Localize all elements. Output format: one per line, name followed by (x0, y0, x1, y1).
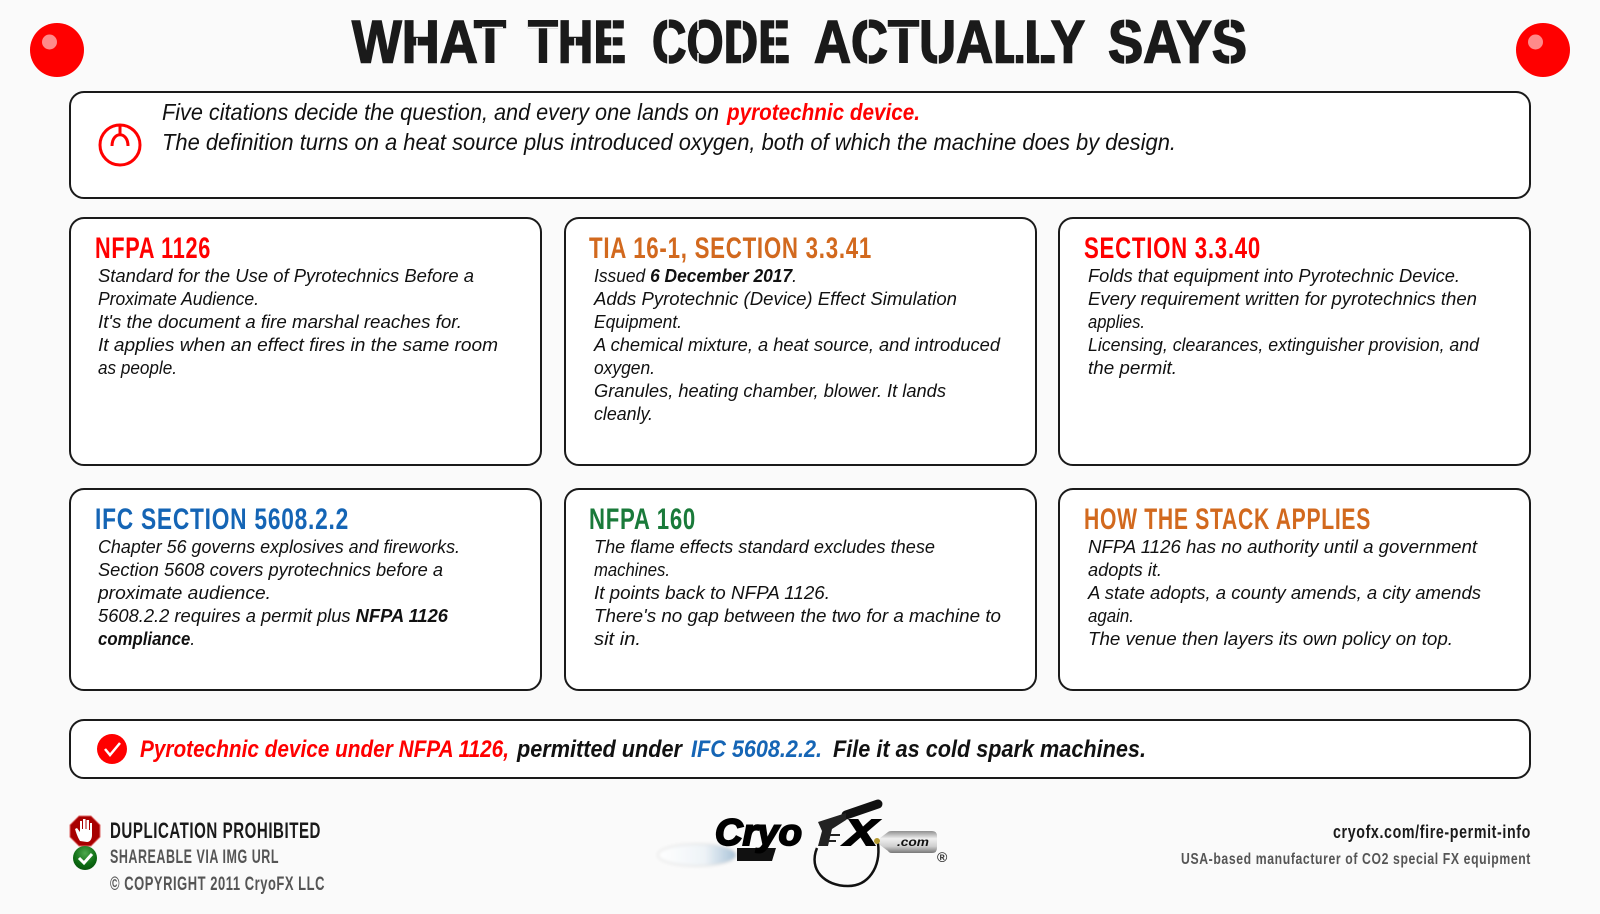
body text: Standard for the Use of Pyrotechnics Before a (98, 266, 474, 286)
body text (97, 537, 460, 649)
body text: Adds Pyrotechnic (Device) Effect Simulation (593, 289, 957, 309)
logo hose (815, 843, 878, 886)
body text: Equipment. (594, 312, 682, 332)
body text: machines. (594, 560, 670, 580)
body text (1088, 266, 1480, 378)
logo cylinder (874, 831, 937, 853)
body text: cleanly. (594, 404, 653, 424)
conclusion: red part: Pyrotechnic device under NFPA 1126, (140, 736, 509, 763)
title: WHAT (352, 8, 506, 76)
icon: gauge (100, 125, 140, 165)
logo registered mark: ® (937, 849, 948, 865)
body text: NFPA 1126 has no authority until a government (1088, 537, 1478, 557)
body text (593, 266, 1001, 424)
panel: How the stack applies (1059, 489, 1530, 690)
body text: The flame effects standard excludes these (594, 537, 935, 557)
body text: as people. (98, 358, 177, 378)
body text: A state adopts, a county amends, a city amends (1087, 583, 1481, 603)
logo: CryoFX (658, 804, 948, 886)
body text: Chapter 56 governs explosives and fireworks. (98, 537, 460, 557)
body text: sit in. (594, 629, 641, 649)
title: ACTUALLY (814, 8, 1085, 76)
body text: Folds that equipment into Pyrotechnic Device. (1088, 266, 1460, 286)
conclusion: closing: File it as cold spark machines. (833, 736, 1146, 763)
body text: 5608.2.2 requires a permit plus NFPA 1126 (98, 606, 449, 626)
body text: Licensing, clearances, extinguisher provision, and (1088, 335, 1480, 355)
logo wordmark: Cryo (715, 812, 802, 853)
body text: A chemical mixture, a heat source, and introduced (593, 335, 1001, 355)
panel: NFPA 160 (565, 489, 1036, 690)
icon: green check (73, 846, 97, 870)
body text: There's no gap between the two for a machine to (594, 606, 1001, 626)
panel: TIA 16-1 (565, 218, 1036, 465)
body text: It applies when an effect fires in the same room (98, 335, 498, 355)
body text: The venue then layers its own policy on top. (1088, 629, 1453, 649)
heading: SECTION 3.3.40 (1084, 232, 1261, 265)
intro highlight: pyrotechnic device. (726, 99, 920, 125)
footer: shareable: SHAREABLE VIA IMG URL (110, 847, 279, 868)
logo nozzle (737, 848, 776, 861)
title: THE (528, 8, 626, 76)
heading: IFC SECTION 5608.2.2 (95, 503, 349, 536)
body text: again. (1088, 606, 1134, 626)
title: CODE (652, 8, 790, 76)
logo gun (818, 804, 878, 846)
body text: proximate audience. (97, 583, 271, 603)
heading: HOW THE STACK APPLIES (1084, 503, 1371, 536)
title: SAYS (1108, 8, 1247, 76)
body text: Proximate Audience. (98, 289, 259, 309)
footer: duplication prohibited: DUPLICATION PROHIBITED (110, 818, 321, 843)
conclusion: permitted under: permitted under (516, 736, 683, 763)
body text (594, 537, 1001, 649)
body text: Granules, heating chamber, blower. It lands (594, 381, 946, 401)
title (352, 8, 1247, 76)
footer: URL: cryofx.com/fire-permit-info (1333, 822, 1531, 842)
panel: NFPA 1126 (70, 218, 541, 465)
body text: Every requirement written for pyrotechnics then (1088, 289, 1477, 309)
body text: oxygen. (594, 358, 655, 378)
body text: applies. (1088, 312, 1145, 332)
icon: stop hand (70, 816, 100, 846)
logo X: X (842, 812, 880, 853)
heading: NFPA 160 (589, 503, 696, 536)
body text: It points back to NFPA 1126. (594, 583, 830, 603)
icon: right red ball (1516, 23, 1570, 77)
panel: conclusion banner (70, 720, 1530, 778)
body text: Section 5608 covers pyrotechnics before a (98, 560, 443, 580)
body text (1087, 537, 1481, 649)
conclusion: IFC reference: IFC 5608.2.2. (691, 736, 822, 763)
panel: intro (70, 92, 1530, 198)
footer: copyright: © COPYRIGHT 2011 CryoFX LLC (110, 874, 325, 895)
icon: red check (97, 734, 127, 764)
body text: adopts it. (1088, 560, 1162, 580)
body text (98, 266, 498, 378)
panel: Section 3.3.40 (1059, 218, 1530, 465)
heading: NFPA 1126 (95, 232, 211, 265)
intro line 1: Five citations decide the question, and every one lands on (162, 99, 719, 125)
intro line 2: The definition turns on a heat source plus introduced oxygen, both of which the machine does by design. (162, 129, 1176, 155)
body text: It's the document a fire marshal reaches for. (98, 312, 462, 332)
icon: left red ball (30, 23, 84, 77)
body text: compliance. (98, 629, 195, 649)
heading: TIA 16-1, SECTION 3.3.41 (589, 232, 872, 265)
body text: Issued 6 December 2017. (594, 266, 797, 286)
logo cylinder: .com (897, 835, 929, 849)
panel: IFC Section 5608.2.2 (70, 489, 541, 690)
body text: the permit. (1088, 358, 1177, 378)
logo smoke (658, 844, 736, 866)
